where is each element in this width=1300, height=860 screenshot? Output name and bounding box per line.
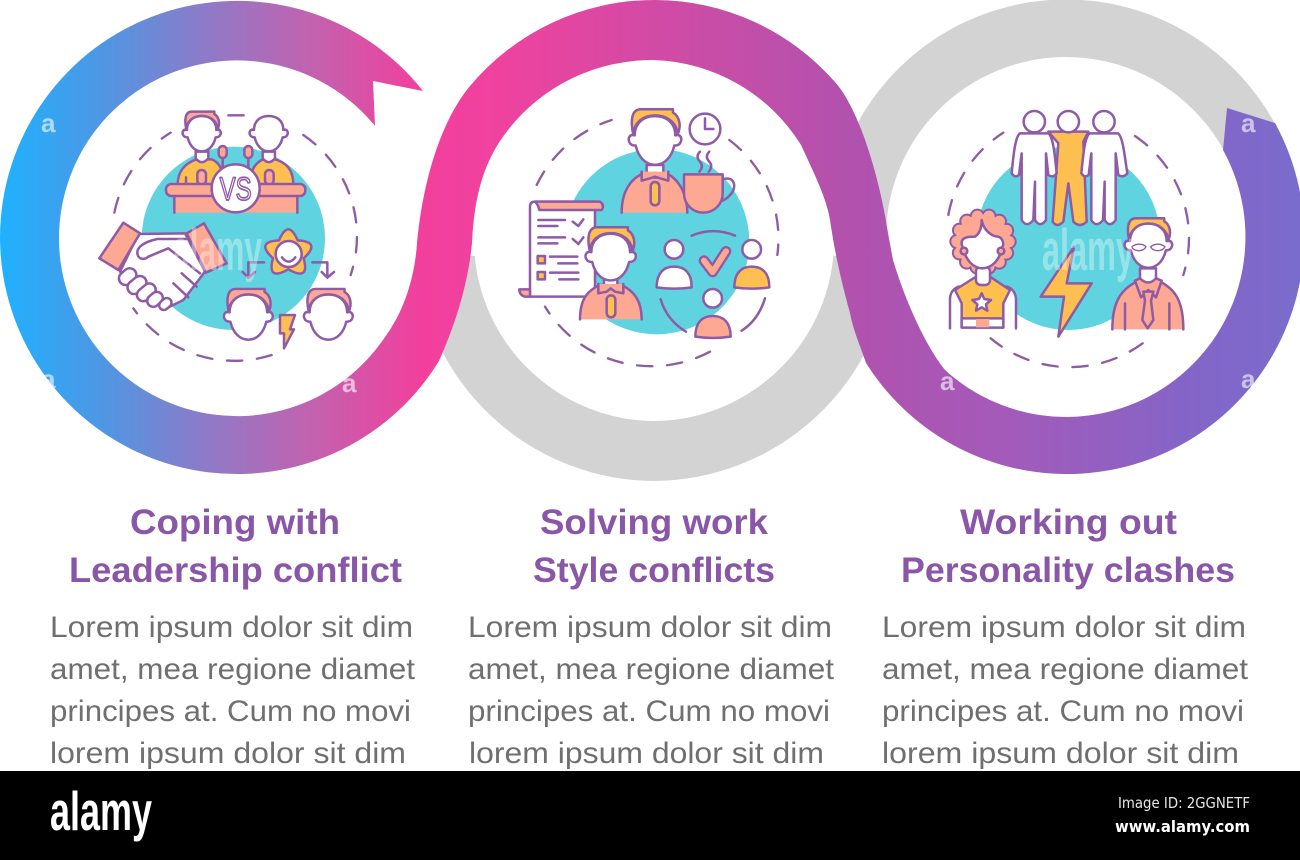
column 2 body text: amet, mea regione diamet	[468, 653, 835, 686]
column 3 body text: principes at. Cum no movi	[882, 695, 1244, 728]
footer bar	[0, 771, 1300, 860]
arrow right	[312, 262, 334, 278]
column 1 body text	[50, 611, 416, 770]
lightning bolt	[1041, 247, 1092, 337]
teal backdrop	[977, 147, 1160, 330]
icon: work style	[519, 109, 778, 366]
star with smile	[265, 229, 311, 274]
column 1 heading: Coping with	[130, 503, 340, 542]
column 3 heading	[901, 503, 1235, 590]
icon: leadership conflict	[99, 112, 357, 361]
footer image id: Image ID: 2GGNETF	[1118, 794, 1250, 812]
white circle: left	[59, 59, 415, 415]
teal backdrop	[564, 149, 749, 334]
arrow left	[243, 262, 264, 278]
gradient ribbon	[0, 0, 1300, 474]
column 1 body text: principes at. Cum no movi	[50, 695, 411, 728]
column 2 body text	[468, 611, 835, 770]
column 2 body text: Lorem ipsum dolor sit dim	[468, 611, 832, 644]
person bottom right	[304, 289, 353, 340]
watermark marks: a	[41, 364, 56, 394]
column 2 body text: lorem ipsum dolor sit dim	[469, 737, 824, 770]
three standing people	[1012, 111, 1127, 225]
man with glasses	[1112, 218, 1183, 329]
icon: personality clashes	[948, 111, 1189, 367]
column 1 heading: Leadership conflict	[69, 551, 402, 590]
white circle: right	[886, 57, 1246, 417]
person top	[622, 109, 687, 213]
column 1 body text: amet, mea regione diamet	[50, 653, 416, 686]
microphones	[219, 146, 252, 170]
dashed ring	[537, 120, 778, 366]
steam	[697, 152, 711, 172]
watermark marks: a	[342, 368, 357, 398]
column 3 body text: amet, mea regione diamet	[882, 653, 1249, 686]
column 3 heading: Working out	[960, 503, 1177, 542]
handshake	[99, 223, 227, 312]
column 2 heading: Solving work	[540, 503, 769, 542]
clock	[690, 114, 720, 144]
person lower	[580, 227, 642, 319]
dashed ring	[114, 115, 357, 361]
debater left	[178, 112, 223, 185]
watermark marks: a	[1241, 364, 1256, 394]
column 1 body text: lorem ipsum dolor sit dim	[50, 737, 406, 770]
watermark: center alamy right: alamy	[1042, 218, 1134, 283]
gray ring: right circle upper arc	[858, 29, 1267, 237]
dashed ring	[948, 133, 1189, 367]
watermark marks: a	[41, 108, 56, 138]
column 2 body text: principes at. Cum no movi	[468, 695, 830, 728]
column 1 body text: Lorem ipsum dolor sit dim	[50, 611, 413, 644]
VS badge: VS	[220, 170, 252, 207]
teal backdrop	[142, 147, 325, 330]
document checklist	[519, 202, 603, 297]
column 3 body text	[882, 611, 1249, 770]
footer logo: alamy	[50, 780, 152, 842]
gray ring: middle circle lower arc	[446, 258, 862, 451]
debater right	[250, 116, 293, 185]
column 3 body text: lorem ipsum dolor sit dim	[882, 737, 1239, 770]
column 3 body text: Lorem ipsum dolor sit dim	[882, 611, 1246, 644]
person bottom left	[224, 289, 273, 340]
watermark marks: a	[940, 366, 955, 396]
team with check	[657, 231, 769, 338]
column 2 heading	[533, 503, 775, 590]
coffee cup	[684, 174, 734, 213]
woman with curly hair	[950, 214, 1016, 328]
watermark marks: a	[1241, 108, 1256, 138]
column 1 heading	[69, 503, 402, 590]
column 3 heading: Personality clashes	[901, 551, 1235, 590]
VS badge	[212, 164, 260, 212]
watermark marks	[41, 108, 1256, 398]
small lightning	[280, 315, 295, 348]
desk	[166, 184, 305, 213]
column 2 heading: Style conflicts	[533, 551, 775, 590]
footer url: www.alamy.com	[1115, 817, 1250, 836]
watermark: center alamy left: alamy	[172, 218, 262, 283]
white circle: middle	[474, 60, 834, 420]
